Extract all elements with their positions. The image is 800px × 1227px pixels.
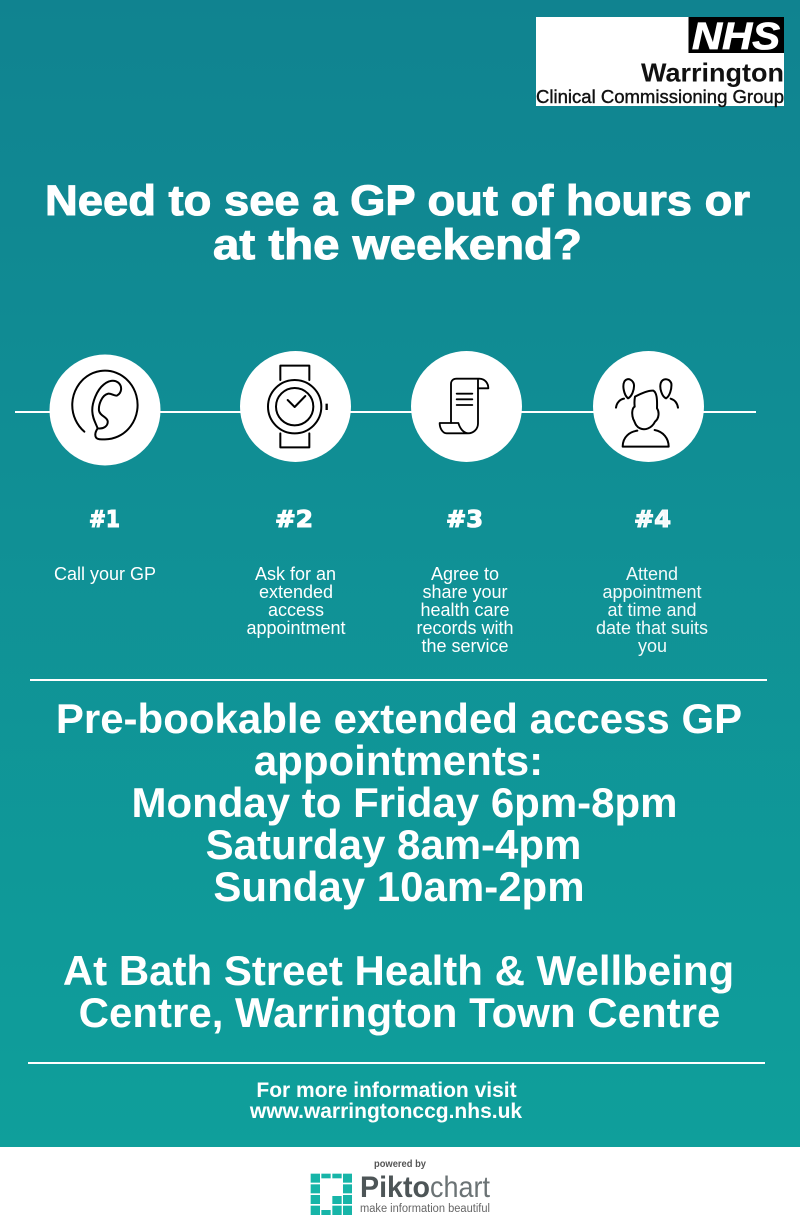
title: at the weekend?: [213, 221, 582, 269]
step 4: Attend: [626, 564, 678, 584]
step 3: share your: [422, 582, 508, 602]
step 3: Agree to: [431, 564, 499, 584]
step 3: health care: [420, 600, 510, 620]
step 2: access: [268, 600, 324, 620]
step 3: #3: [446, 507, 483, 533]
timeline connector line: [15, 411, 756, 413]
opening hours text block: Centre, Warrington Town Centre: [79, 989, 720, 1036]
Piktochart logo: [311, 1159, 491, 1215]
opening hours text block: [56, 695, 742, 1036]
step 1: Call your GP: [54, 564, 156, 584]
Piktochart logo: powered by: [374, 1159, 426, 1170]
Piktochart logo: chart: [430, 1171, 491, 1204]
icon: wristwatch: [240, 351, 351, 462]
more information text: www.warringtonccg.nhs.uk: [249, 1100, 522, 1123]
upper divider: [30, 679, 767, 681]
Piktochart logo: Pikto: [360, 1171, 430, 1204]
NHS Warrington CCG logo: NHS: [692, 16, 780, 58]
more information text: [249, 1079, 522, 1123]
step 2: extended: [259, 582, 333, 602]
title: Need to see a GP out of hours or: [45, 177, 750, 225]
icon: telephone: [50, 354, 160, 466]
title: [45, 177, 750, 269]
opening hours text block: At Bath Street Health & Wellbeing: [63, 947, 734, 994]
step 3: [416, 507, 514, 656]
icon: scroll document: [411, 351, 522, 462]
step 4: you: [638, 636, 667, 656]
opening hours text block: Monday to Friday 6pm-8pm: [131, 779, 678, 826]
NHS Warrington CCG logo: Clinical Commissioning Group: [536, 87, 784, 107]
step 3: records with: [416, 618, 514, 638]
step 2: #2: [275, 507, 313, 533]
NHS Warrington CCG logo: [536, 16, 784, 107]
opening hours text block: Sunday 10am-2pm: [213, 863, 585, 910]
panel: footer: [0, 1147, 800, 1227]
icon: people group: [593, 351, 704, 462]
step 4: #4: [634, 507, 671, 533]
step 3: the service: [421, 636, 509, 656]
more information text: For more information visit: [256, 1079, 517, 1102]
step 1: [54, 507, 156, 584]
step 2: [246, 507, 346, 638]
opening hours text block: appointments:: [254, 737, 543, 784]
opening hours text block: Pre-bookable extended access GP: [56, 695, 742, 742]
Piktochart logo: make information beautiful: [360, 1203, 490, 1215]
step 4: appointment: [602, 582, 702, 602]
opening hours text block: Saturday 8am-4pm: [206, 821, 581, 868]
lower divider: [28, 1062, 765, 1064]
step 2: Ask for an: [255, 564, 336, 584]
step 2: appointment: [246, 618, 346, 638]
step 4: [596, 507, 708, 656]
step 4: at time and: [607, 600, 697, 620]
NHS Warrington CCG logo: Warrington: [641, 58, 784, 88]
step 1: #1: [89, 507, 120, 533]
step 4: date that suits: [596, 618, 708, 638]
